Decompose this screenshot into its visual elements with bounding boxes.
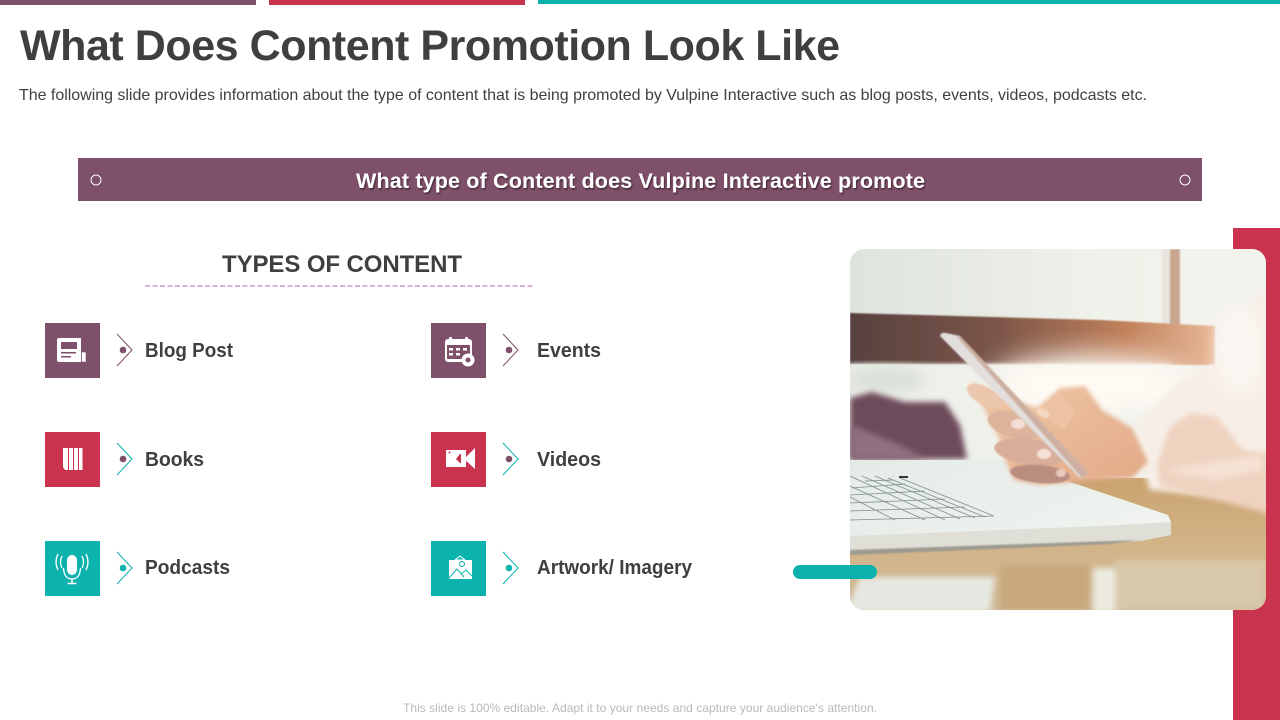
- teal pill accent: [793, 565, 877, 579]
- laptop: [850, 460, 1171, 555]
- icon: newspaper: [45, 323, 100, 378]
- thumb: [1048, 398, 1074, 429]
- icon: microphone: [45, 541, 100, 596]
- photo: hand holding phone over laptop: [845, 249, 1270, 612]
- title: What Does Content Promotion Look Like: [20, 22, 840, 70]
- top accent bars: [0, 0, 1280, 5]
- phone: [940, 333, 1088, 479]
- table reflections: [846, 560, 1266, 612]
- chevron marker: [117, 552, 132, 584]
- bright background: [850, 360, 1171, 410]
- banner: content question: [78, 158, 1202, 201]
- shirt sleeve: [1141, 362, 1215, 498]
- item: events: Events: [537, 340, 601, 362]
- chevron marker: [117, 334, 132, 366]
- chevron marker: [503, 552, 518, 584]
- item: artwork / imagery: Artwork/ Imagery: [537, 557, 693, 579]
- item: blog post: [45, 323, 233, 378]
- right hand: [1157, 413, 1270, 514]
- icon: calendar: [431, 323, 486, 378]
- window frame: [1162, 249, 1266, 331]
- icon: books: [45, 432, 100, 487]
- chevron marker: [503, 334, 518, 366]
- item: blog post: Blog Post: [145, 340, 233, 362]
- item: videos: Videos: [537, 449, 601, 471]
- icon: video camera: [431, 432, 486, 487]
- red side block: [1233, 228, 1280, 720]
- purple object: [850, 392, 967, 460]
- item: videos: [431, 432, 601, 487]
- chevron marker: [503, 443, 518, 475]
- footer note: This slide is 100% editable. Adapt it to your needs and capture your audience's attention.: [403, 701, 877, 715]
- subtitle text: The following slide provides information about the type of content that is being promoted by Vulpine Interactive such as blog posts, events, videos, podcasts etc.: [19, 87, 1147, 104]
- dark band: [850, 313, 1215, 365]
- heading: types of content: TYPES OF CONTENT: [222, 251, 462, 278]
- item: books: [45, 432, 204, 487]
- banner: content question: What type of Content does Vulpine Interactive promote: [356, 169, 925, 193]
- item: podcasts: [45, 541, 230, 596]
- wood table: [850, 478, 1266, 610]
- item: podcasts: Podcasts: [145, 557, 230, 579]
- chevron marker: [117, 443, 132, 475]
- hand base: [970, 382, 1148, 485]
- icon: framed picture: [431, 541, 486, 596]
- item: books: Books: [145, 449, 204, 471]
- item: events: [431, 323, 601, 378]
- keyboard: [850, 476, 994, 520]
- fingers: [963, 379, 1071, 486]
- item: artwork / imagery: [431, 541, 693, 596]
